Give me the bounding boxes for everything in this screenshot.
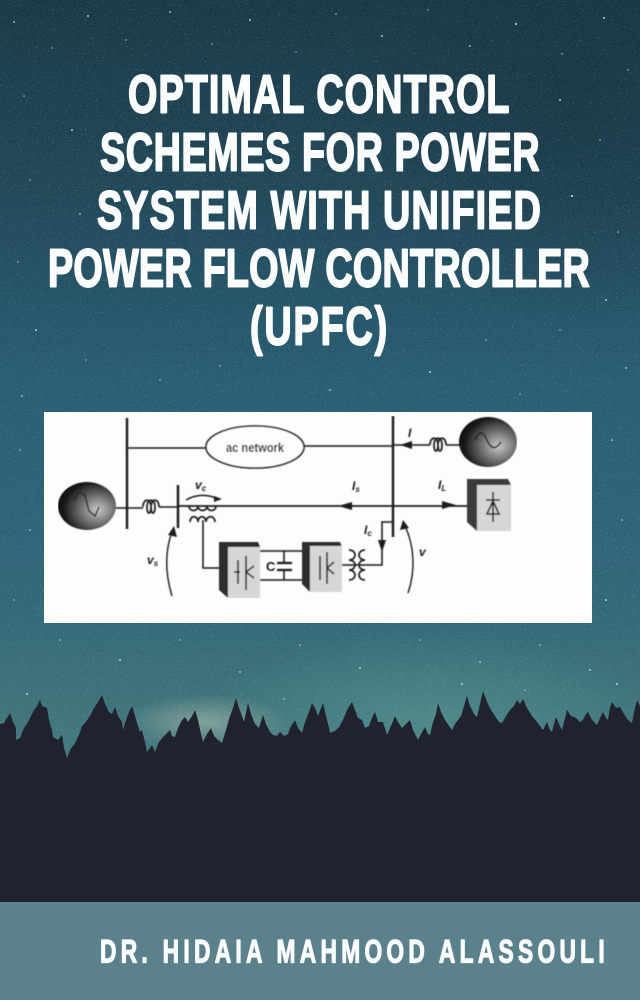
ac network ellipse: ac network (226, 440, 285, 455)
circuit labels: c (367, 529, 372, 538)
circuit labels: v (419, 545, 427, 559)
circuit labels: I (438, 478, 441, 492)
circuit labels: s (154, 559, 159, 568)
circuit labels: c (202, 484, 207, 493)
circuit labels: I (408, 426, 412, 440)
inductors and transformers (143, 438, 446, 580)
circuit labels: L (441, 484, 446, 493)
circuit labels: v (195, 478, 202, 492)
converter box 1 (219, 542, 260, 598)
title: SYSTEM WITH UNIFIED (97, 180, 541, 240)
author name: DR. HIDAIA MAHMOOD ALASSOULI (100, 934, 605, 969)
title: OPTIMAL CONTROL (128, 64, 510, 124)
stars (13, 9, 629, 700)
capacitor: C (266, 559, 276, 574)
circuit labels: v (147, 553, 154, 567)
title: (UPFC) (250, 296, 387, 356)
icon: right ac source (459, 417, 517, 467)
load box (467, 479, 511, 531)
icon: left ac source (58, 482, 116, 530)
arrows (168, 441, 456, 552)
title: POWER FLOW CONTROLLER (48, 238, 590, 298)
panel: UPFC circuit diagram (44, 412, 592, 623)
converter box 2 (302, 542, 342, 592)
circuit labels: s (355, 485, 360, 494)
ac network ellipse (206, 426, 304, 468)
diagram wiring (110, 416, 468, 580)
author band (0, 902, 640, 1000)
title (48, 64, 590, 356)
circuit labels: I (364, 523, 367, 537)
voltage arc arrows (167, 495, 413, 596)
circuit labels: I (352, 479, 355, 493)
capacitor (266, 559, 292, 574)
diagram artwork (58, 416, 517, 598)
circuit labels (147, 426, 446, 568)
title: SCHEMES FOR POWER (100, 122, 540, 182)
forest silhouette (0, 691, 640, 905)
